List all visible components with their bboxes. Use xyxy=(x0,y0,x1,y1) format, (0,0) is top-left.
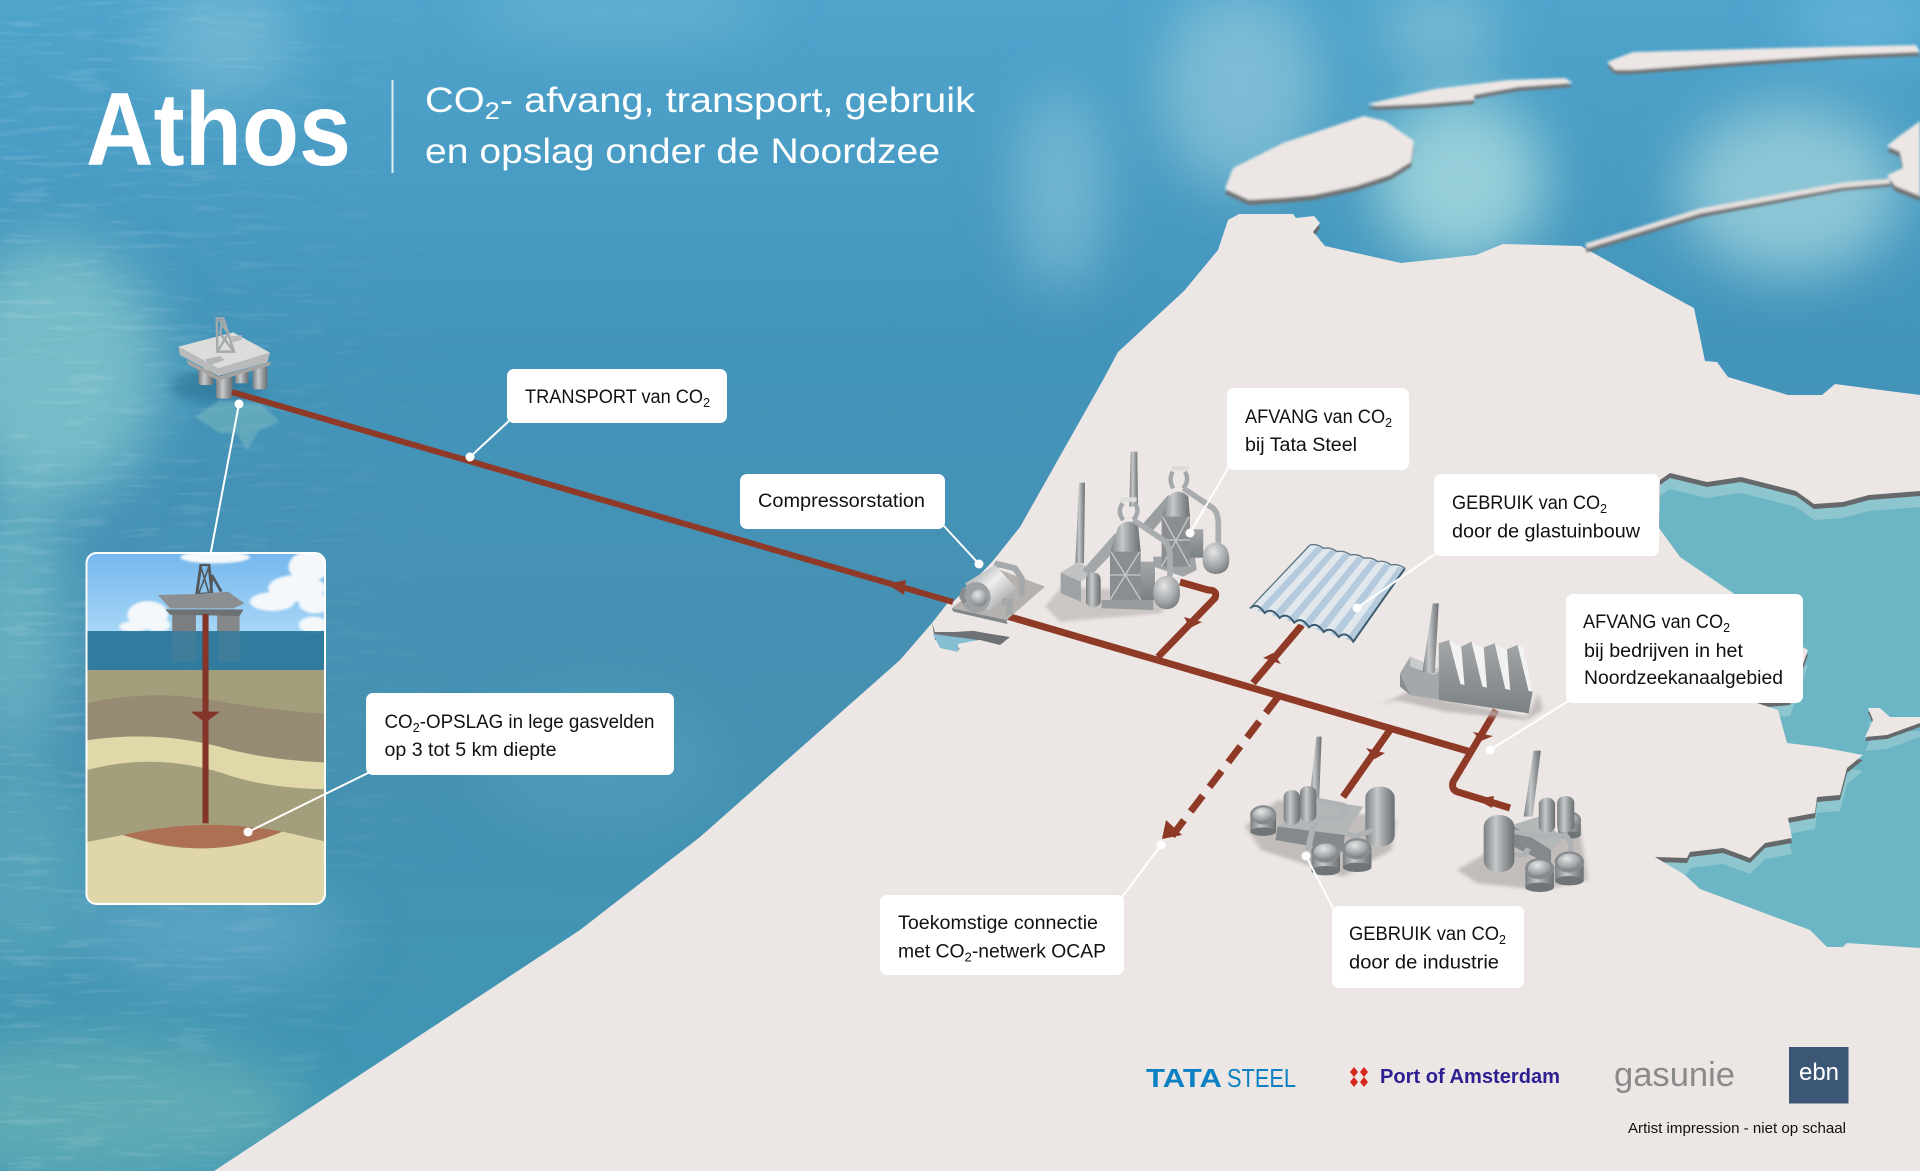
land: northern islands and dike xyxy=(1225,45,1920,250)
callout: GEBRUIK industrie: GEBRUIK van CO xyxy=(1349,924,1504,945)
callout: GEBRUIK industrie: door de industrie xyxy=(1349,952,1499,974)
callout: Toekomstige connectie xyxy=(880,840,1166,975)
title divider xyxy=(392,80,394,173)
logo: EBN: ebn xyxy=(1799,1059,1839,1086)
icon: compressor station xyxy=(952,564,1045,624)
platform reflection xyxy=(195,400,280,450)
platform deck xyxy=(187,360,272,381)
subtitle: 2 xyxy=(485,98,500,125)
subtitle xyxy=(425,81,976,171)
subtitle: - afvang, transport, gebruik xyxy=(500,81,976,120)
callout: CO2-OPSLAG xyxy=(244,693,674,836)
front furnace xyxy=(1086,497,1180,610)
callout: AFVANG bij Tata Steel: AFVANG van CO xyxy=(1245,407,1391,428)
chimneys xyxy=(1075,483,1085,563)
water xyxy=(84,631,329,670)
land: main coast with edge and reflection xyxy=(214,214,1920,1171)
footnote: Artist impression - niet op schaal xyxy=(1628,1120,1846,1137)
flow arrows on land pipelines xyxy=(1162,617,1494,839)
logo: Port of Amsterdam: Port of Amsterdam xyxy=(1380,1066,1560,1088)
harbour piers at compressor station xyxy=(932,600,1010,652)
callout: AFVANG Noordzeekanaalgebied: AFVANG van CO xyxy=(1583,612,1729,633)
callout: AFVANG Noordzeekanaalgebied xyxy=(1486,594,1803,754)
logo: Tata Steel: TATA xyxy=(1146,1063,1222,1093)
icon: greenhouse xyxy=(1250,545,1405,642)
callout: GEBRUIK industrie xyxy=(1302,852,1524,988)
callout: TRANSPORT van CO2 xyxy=(466,369,727,462)
callout: GEBRUIK glastuinbouw: 2 xyxy=(1600,501,1607,516)
callout: AFVANG bij Tata Steel: 2 xyxy=(1385,415,1392,430)
callout: Toekomstige connectie: met CO xyxy=(898,942,963,962)
callout: CO2-OPSLAG: op 3 tot 5 km diepte xyxy=(384,740,556,761)
gas field xyxy=(123,825,282,848)
left block and conveyor xyxy=(1061,573,1081,602)
subtitle: CO xyxy=(425,81,478,120)
icon: industry plant left xyxy=(1245,737,1396,877)
water ripple texture xyxy=(0,0,320,1171)
well pipe with arrow xyxy=(191,614,220,823)
land: small island in bay xyxy=(1865,708,1920,751)
arrow on pipeline xyxy=(887,580,906,595)
callout: GEBRUIK glastuinbouw: GEBRUIK van CO xyxy=(1452,493,1607,514)
callout: GEBRUIK glastuinbouw: door de glastuinbouw xyxy=(1452,522,1640,542)
logo: Tata Steel xyxy=(1146,1063,1296,1093)
icon: industry plant right xyxy=(1457,751,1588,892)
geological layers xyxy=(88,670,324,848)
callout: platform leader xyxy=(210,400,244,554)
platform legs xyxy=(198,367,267,399)
callout: Compressorstation xyxy=(740,474,984,568)
callout: AFVANG Noordzeekanaalgebied: 2 xyxy=(1723,620,1730,635)
inland bay water xyxy=(1600,420,1920,980)
callout: Toekomstige connectie: -netwerk OCAP xyxy=(972,942,1106,962)
logo: Tata Steel: STEEL xyxy=(1227,1063,1296,1093)
pipelines on land xyxy=(1000,582,1510,836)
callout: Toekomstige connectie: 2 xyxy=(965,950,972,964)
rear furnace xyxy=(1143,466,1229,577)
callout: AFVANG Noordzeekanaalgebied: Noordzeekanaalgebied xyxy=(1584,668,1783,689)
callout: TRANSPORT van CO2: 2 xyxy=(703,395,710,410)
logo: Gasunie: gasunie xyxy=(1614,1056,1735,1094)
icon: Tata Steel blast furnaces xyxy=(1045,452,1229,622)
callout: Compressorstation: Compressorstation xyxy=(758,491,925,512)
callout: CO2-OPSLAG: 2 xyxy=(413,720,420,735)
callout: CO2-OPSLAG: CO xyxy=(384,712,413,733)
callout: Toekomstige connectie: Toekomstige connectie xyxy=(898,913,1098,934)
platform at sea xyxy=(170,318,280,450)
callout: TRANSPORT van CO2: TRANSPORT van CO xyxy=(525,387,711,408)
rig in card xyxy=(158,565,244,632)
sky xyxy=(84,550,329,632)
callout: GEBRUIK industrie: 2 xyxy=(1499,932,1506,947)
callout: CO2-OPSLAG: -OPSLAG in lege gasvelden xyxy=(420,712,654,733)
callout: GEBRUIK glastuinbouw xyxy=(1352,474,1659,612)
icon: factory xyxy=(1380,603,1543,720)
platform derrick xyxy=(217,318,234,352)
subtitle: en opslag onder de Noordzee xyxy=(425,132,940,171)
clouds xyxy=(119,551,331,633)
title: Athos xyxy=(86,72,351,188)
logo: EBN xyxy=(1789,1047,1848,1104)
callout: AFVANG bij Tata Steel xyxy=(1186,388,1409,538)
callout: AFVANG bij Tata Steel: bij Tata Steel xyxy=(1245,435,1357,456)
pipeline offshore to land xyxy=(232,392,953,602)
callout: AFVANG Noordzeekanaalgebied: bij bedrijven in het xyxy=(1584,641,1744,662)
inset card: cross-section of CO2 storage xyxy=(84,550,331,910)
